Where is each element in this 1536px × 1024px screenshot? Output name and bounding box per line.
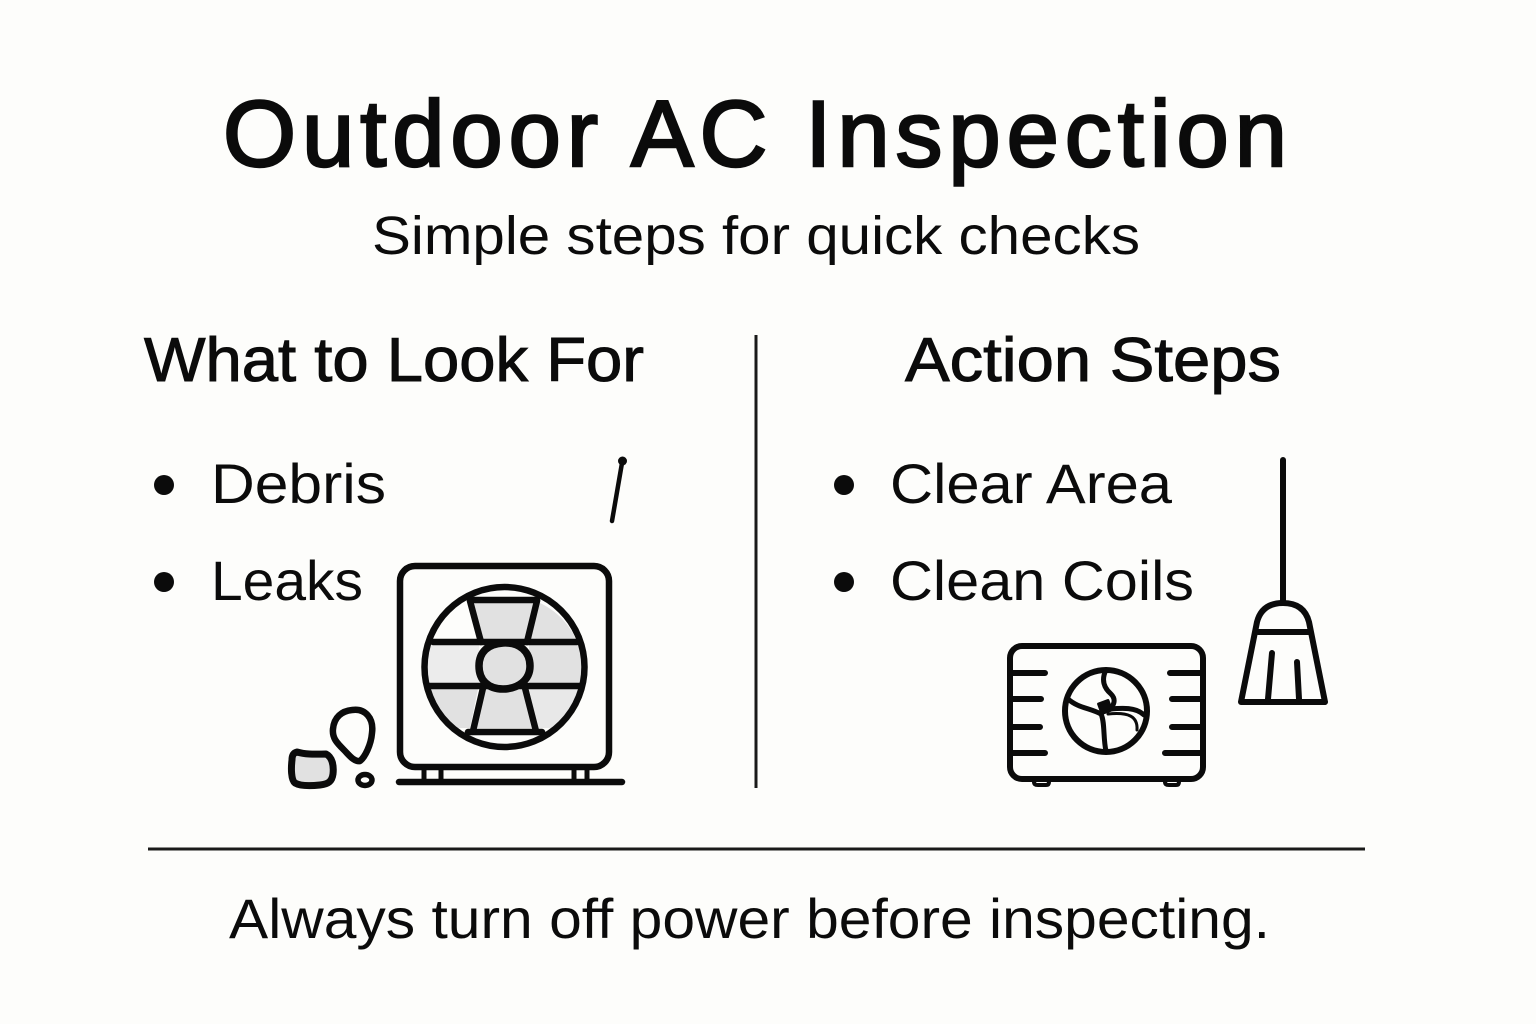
- bullet item: clean coils: Clean Coils: [890, 549, 1194, 612]
- bullet item: clear area: Clear Area: [890, 452, 1173, 515]
- panel: action steps: [834, 326, 1325, 785]
- bullet item: debris: [154, 452, 386, 515]
- icon: clean AC unit: [1010, 646, 1203, 785]
- bullet item: leaks: Leaks: [211, 549, 363, 612]
- vertical divider: [754, 335, 758, 788]
- icon: debris rocks: [291, 710, 372, 786]
- heading: action steps: Action Steps: [905, 326, 1281, 395]
- horizontal divider: [148, 848, 1365, 850]
- heading: what to look for: What to Look For: [144, 326, 644, 395]
- icon: broom: [1241, 460, 1325, 702]
- icon: outdoor AC unit with fan: [399, 566, 622, 782]
- title: Outdoor AC Inspection: [223, 81, 1287, 186]
- safety footer note: Always turn off power before inspecting.: [229, 887, 1270, 950]
- panel: what to look for: [144, 326, 644, 786]
- subtitle: Simple steps for quick checks: [372, 206, 1140, 266]
- bullet item: debris: Debris: [211, 452, 386, 515]
- icon: stick debris: [612, 456, 627, 521]
